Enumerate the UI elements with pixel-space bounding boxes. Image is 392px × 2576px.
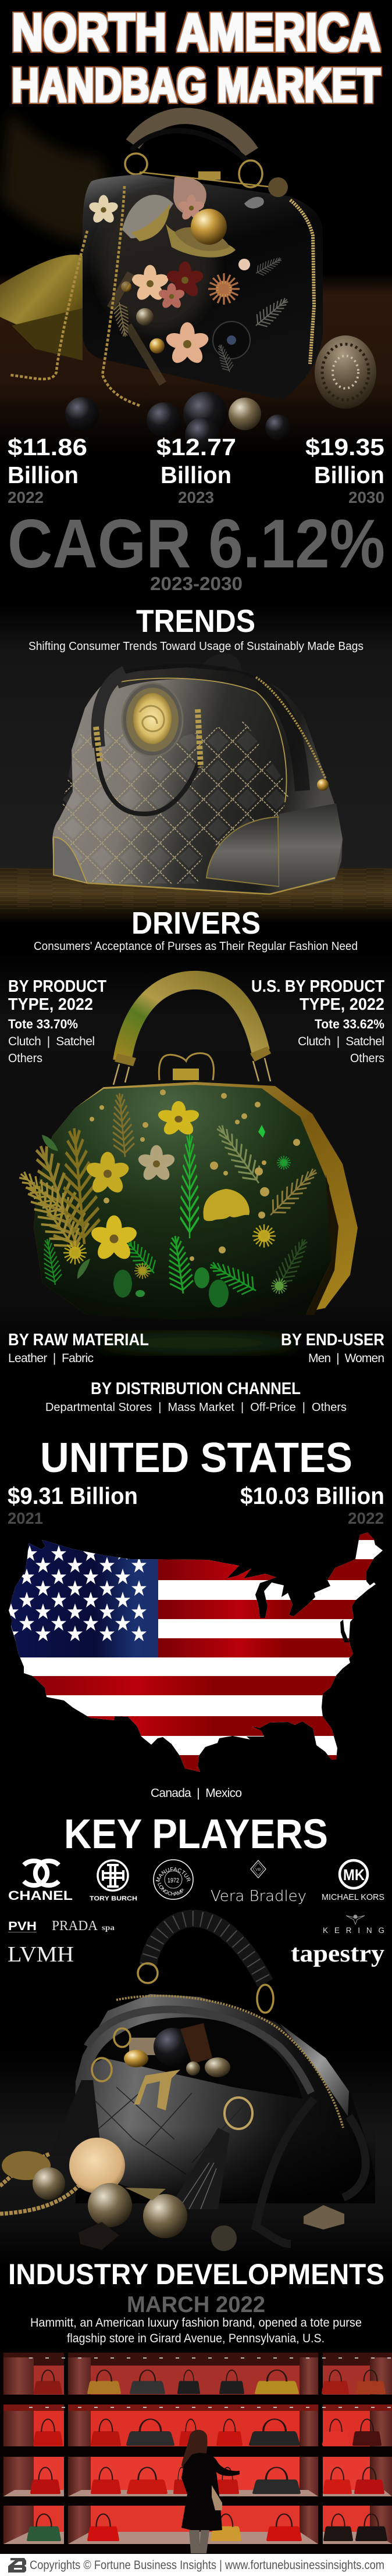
bag body xyxy=(75,1994,375,2203)
stat 2023: 2023 xyxy=(178,488,214,506)
woman shopper xyxy=(181,2430,240,2553)
logo: Longchamp: 1972 xyxy=(168,1877,179,1884)
logo: Kering: KERING xyxy=(323,1926,384,1935)
US stat 2021: $9.31 Billion xyxy=(8,1482,138,1509)
segment: by raw material xyxy=(8,1331,149,1365)
metal balls xyxy=(33,2167,187,2238)
segment: by distribution channel: Departmental Stores | Mass Market | Off-Price | Others xyxy=(45,1400,347,1414)
green ferns xyxy=(39,1134,313,1300)
Chesapeake bay xyxy=(340,1620,349,1642)
segment: by distribution channel: BY DISTRIBUTION CHANNEL xyxy=(91,1380,301,1398)
braided handle xyxy=(138,1918,273,2013)
segment: U.S. by product type 2022: TYPE, 2022 xyxy=(300,995,384,1014)
segment: by end-user: BY END-USER xyxy=(281,1331,384,1349)
clasp xyxy=(159,1053,214,1080)
segment: U.S. by product type 2022: Clutch | Satchel xyxy=(298,1035,384,1048)
logo: Vera Bradley xyxy=(211,1860,307,1905)
shelf frame xyxy=(0,2352,392,2554)
development text: Hammitt, an American luxury fashion brand, opened a tote purse xyxy=(30,2316,362,2330)
logo: Chanel: CHANEL xyxy=(8,1888,73,1903)
logo: Michael Kors: MICHAEL KORS xyxy=(322,1892,384,1902)
bag opening xyxy=(93,2017,302,2099)
footer logo xyxy=(8,2558,26,2573)
logo: Prada: PRADA xyxy=(52,1918,98,1934)
zip pull xyxy=(317,779,329,791)
dark marbles xyxy=(65,392,291,452)
segment: by distribution channel xyxy=(45,1380,347,1414)
camera-like ornament xyxy=(211,2225,237,2251)
gold zipper xyxy=(116,1996,343,2128)
logo: PVH: PVH xyxy=(8,1920,37,1933)
gold shell xyxy=(204,1189,250,1221)
stat 2023 xyxy=(156,434,236,506)
stat 2022: 2022 xyxy=(8,488,44,506)
side panels xyxy=(3,2357,392,2544)
row 3 bags xyxy=(30,2467,384,2494)
canton xyxy=(9,1540,158,1657)
segment: by product type 2022: Tote 33.70% xyxy=(8,1017,78,1031)
bag handle xyxy=(125,116,262,187)
segment: by raw material: BY RAW MATERIAL xyxy=(8,1331,149,1349)
ceiling lights xyxy=(29,2358,392,2407)
stat 2022: $11.86 xyxy=(8,434,87,460)
logo: Longchamp: LONGCHAMP xyxy=(158,1882,184,1896)
market size stats xyxy=(8,434,385,594)
title xyxy=(12,3,380,112)
segment: by product type 2022 xyxy=(8,977,107,1065)
bag handles back xyxy=(187,660,236,756)
segment: by product type 2022: BY PRODUCT xyxy=(8,977,107,996)
segment: by product type 2022: TYPE, 2022 xyxy=(8,995,93,1014)
front pockets xyxy=(54,803,343,894)
green glass drops xyxy=(113,1125,265,1307)
medallion xyxy=(122,683,183,756)
shelf floors xyxy=(3,2490,392,2544)
bag handles front xyxy=(96,672,201,814)
segment: by end-user: Men | Women xyxy=(308,1352,384,1365)
drivers heading: DRIVERS xyxy=(131,906,261,941)
segment: by product type 2022: Clutch | Satchel xyxy=(8,1035,95,1048)
logo: Longchamp: MANUFACTURE xyxy=(156,1867,191,1882)
yellow flowers xyxy=(63,1101,291,1294)
gold fern xyxy=(13,1127,102,1259)
small box left xyxy=(79,2222,119,2250)
row 2 bags xyxy=(33,2419,382,2446)
stat 2023: Billion xyxy=(161,462,231,488)
logo: Vera Bradley: Vera Bradley xyxy=(211,1888,307,1905)
quilting xyxy=(54,721,291,884)
stat 2030: 2030 xyxy=(348,488,384,506)
logo: Prada: spa xyxy=(102,1924,115,1932)
logo: Longchamp xyxy=(153,1859,194,1900)
stat 2022 xyxy=(8,434,87,506)
US stat 2021 xyxy=(8,1482,138,1527)
bag body xyxy=(83,174,323,400)
key players heading: KEY PLAYERS xyxy=(64,1812,328,1857)
stars xyxy=(3,1544,147,1641)
store shelves with handbags xyxy=(0,2352,392,2554)
gold chains xyxy=(10,186,140,406)
scene floor and drape xyxy=(0,110,392,453)
logos xyxy=(8,1859,384,1967)
gold cluster xyxy=(2,2151,51,2180)
segment: U.S. by product type 2022 xyxy=(251,977,385,1065)
rim shade xyxy=(305,1174,338,1315)
logo: Vera Bradley: VB xyxy=(255,1868,261,1872)
logo: Kering xyxy=(323,1915,384,1935)
green leaf accents xyxy=(42,1135,90,1279)
dome highlight xyxy=(279,2023,349,2116)
drivers text: Consumers' Acceptance of Purses as Their Regular Fashion Need xyxy=(34,940,358,953)
floor xyxy=(0,2052,392,2267)
scattered gold sprigs xyxy=(90,1089,300,1278)
illustration: green floral handbag xyxy=(13,980,358,1320)
logo: Michael Kors xyxy=(322,1860,384,1902)
logo: Tory Burch xyxy=(90,1860,137,1902)
crystal ornament xyxy=(268,177,288,197)
stat 2022: Billion xyxy=(8,462,79,488)
US stat 2022: $10.03 Billion xyxy=(240,1482,384,1509)
stat 2023: $12.77 xyxy=(156,434,236,460)
top rim xyxy=(87,2009,311,2093)
row 1 bags xyxy=(34,2370,386,2394)
logo: Michael Kors: MK xyxy=(343,1866,365,1884)
stat 2030: Billion xyxy=(314,462,384,488)
US stat 2022 xyxy=(240,1482,384,1527)
illustration: quilted grey handbag xyxy=(52,660,343,894)
tassels xyxy=(49,2080,230,2209)
cream ball xyxy=(69,2138,125,2193)
segment: by raw material: Leather | Fabric xyxy=(8,1352,94,1365)
stat 2030: $19.35 xyxy=(305,434,384,460)
clasp xyxy=(140,172,273,187)
logo: Chanel xyxy=(8,1861,73,1903)
segment: by end-user xyxy=(281,1331,384,1365)
united states heading: UNITED STATES xyxy=(40,1435,352,1481)
bag back rim xyxy=(34,1082,358,1315)
US stat 2021: 2021 xyxy=(8,1509,43,1527)
bag body xyxy=(52,667,343,894)
logo: Tapestry: tapestry xyxy=(291,1941,384,1967)
trends heading: TRENDS xyxy=(136,603,255,639)
floral decorations xyxy=(88,177,293,384)
logo: LVMH: LVMH xyxy=(8,1942,74,1967)
logo: Tory Burch: TORY BURCH xyxy=(90,1895,137,1902)
trends background xyxy=(0,605,392,872)
illustration: black handbag with open top xyxy=(0,1918,392,2267)
contents xyxy=(92,2023,252,2129)
row 4 bags xyxy=(27,2514,387,2541)
green glow xyxy=(99,1332,297,1353)
US flag map xyxy=(0,1529,392,1779)
beaded sphere xyxy=(315,335,376,409)
segment: by product type 2022: Others xyxy=(8,1052,42,1065)
US stat 2022: 2022 xyxy=(348,1509,384,1527)
gold chain xyxy=(0,2154,79,2214)
trends text: Shifting Consumer Trends Toward Usage of Sustainably Made Bags xyxy=(28,640,364,653)
illustration: black handbag with floral decoration xyxy=(0,110,392,453)
handle xyxy=(113,980,271,1085)
top panel and gold piping xyxy=(113,671,326,802)
drivers background xyxy=(0,953,392,1360)
zipper xyxy=(290,200,314,364)
gold stems xyxy=(109,1092,322,1221)
segment: U.S. by product type 2022: Tote 33.62% xyxy=(315,1017,384,1031)
shelf boards and posts xyxy=(0,2352,392,2554)
bag front xyxy=(34,1085,332,1320)
lower shade xyxy=(76,2128,375,2203)
development date: MARCH 2022 xyxy=(127,2292,265,2317)
footer bar xyxy=(0,2554,392,2576)
development text: flagship store in Girard Avenue, Pennsylvania, U.S. xyxy=(67,2332,325,2345)
wood table xyxy=(0,868,392,923)
segment: U.S. by product type 2022: Others xyxy=(350,1052,384,1065)
woven chains right xyxy=(256,2099,366,2244)
small box right xyxy=(304,2205,344,2230)
stat 2030 xyxy=(305,434,384,506)
CAGR period: 2023-2030 xyxy=(150,573,243,594)
development text xyxy=(30,2316,362,2345)
regions text: Canada | Mexico xyxy=(151,1787,242,1800)
quilt lines xyxy=(87,2087,244,2174)
red walls xyxy=(3,2353,392,2544)
